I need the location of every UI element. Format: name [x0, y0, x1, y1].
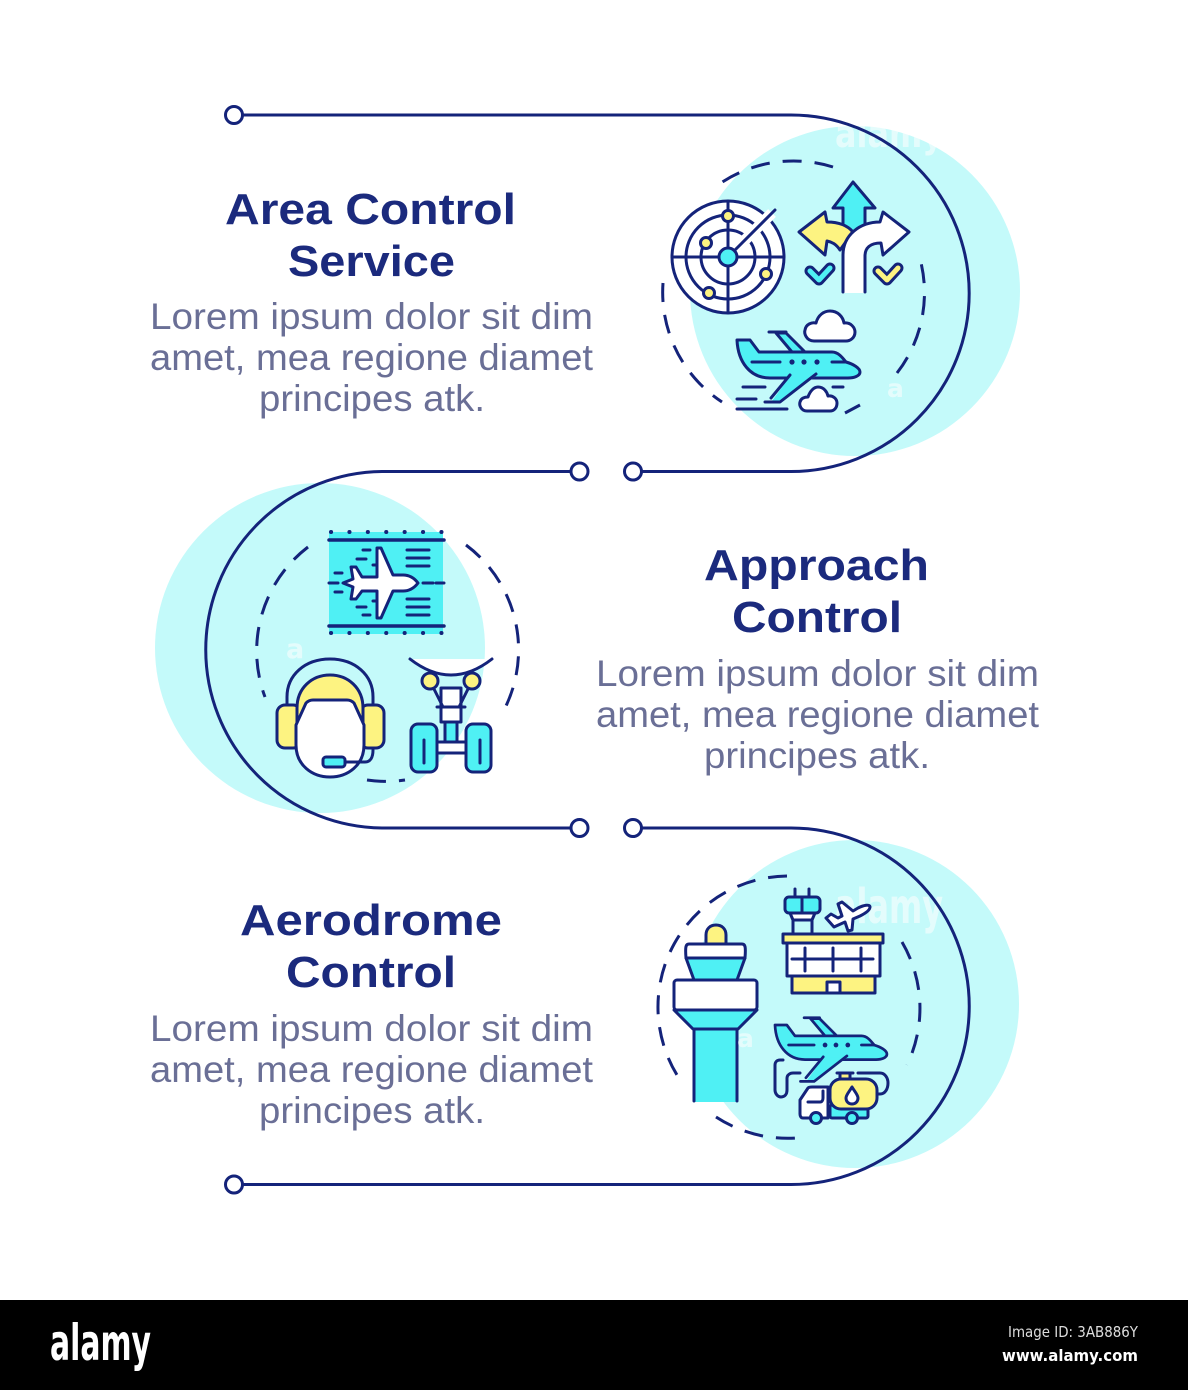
- panel: area control service background circle: [690, 126, 1020, 456]
- connector line: top section: [226, 106, 969, 480]
- footer url: www.alamy.com: [1002, 1346, 1138, 1365]
- text block: approach control: principes atk.: [704, 735, 930, 776]
- heading: area control service: [225, 185, 516, 286]
- connector line: bottom section: [226, 820, 969, 1193]
- icon: landing gear: [410, 659, 492, 772]
- icon: plane and fuel truck: [775, 1018, 888, 1124]
- heading: aerodrome control: Aerodrome: [240, 896, 502, 945]
- heading: aerodrome control: [240, 896, 502, 997]
- panel: approach control background circle: [155, 483, 485, 813]
- watermark: letter near plane: a: [887, 374, 904, 403]
- text block: approach control: Lorem ipsum dolor sit dim: [596, 653, 1039, 694]
- heading: approach control: Approach: [704, 541, 929, 590]
- watermark: letter in middle circle: a: [286, 634, 304, 665]
- footer image id: Image ID: 3AB886Y: [1008, 1323, 1139, 1341]
- text block: aerodrome control: amet, mea regione diamet: [150, 1049, 594, 1090]
- watermark: top circle: alamy: [835, 112, 943, 156]
- heading: area control service: Area Control: [225, 185, 516, 234]
- footer logo: alamy: [50, 1314, 151, 1372]
- watermark: letter near tower: a: [737, 1024, 754, 1053]
- text block: aerodrome control: Lorem ipsum dolor sit dim: [150, 1008, 593, 1049]
- text block: approach control: [596, 653, 1040, 776]
- dashed ring: area control: [663, 161, 924, 413]
- icon: plane in clouds: [737, 311, 860, 411]
- dashed ring: approach control: [257, 545, 519, 781]
- text block: area control service: principes atk.: [259, 378, 485, 419]
- text block: aerodrome control: principes atk.: [259, 1090, 485, 1131]
- icon: control tower: [674, 925, 757, 1102]
- text block: approach control: amet, mea regione diamet: [596, 694, 1040, 735]
- heading: approach control: Control: [732, 593, 902, 642]
- text block: area control service: Lorem ipsum dolor sit dim: [150, 296, 593, 337]
- text block: area control service: amet, mea regione diamet: [150, 337, 594, 378]
- text block: area control service: [150, 296, 594, 419]
- icon: pilot with headset: [277, 659, 384, 777]
- footer bar: [0, 1300, 1188, 1390]
- text block: aerodrome control: [150, 1008, 594, 1131]
- icon: runway with plane: [329, 532, 444, 634]
- icon: direction arrows: [799, 182, 909, 293]
- connector line: middle section: [206, 463, 588, 836]
- heading: approach control: [704, 541, 929, 642]
- icon: airport terminal: [783, 889, 883, 993]
- heading: area control service: Service: [288, 237, 455, 286]
- panel: aerodrome control background circle: [691, 840, 1019, 1168]
- dashed ring: aerodrome control: [658, 876, 920, 1138]
- icon: radar: [672, 201, 784, 313]
- watermark: bottom circle: alamy: [835, 879, 943, 935]
- heading: aerodrome control: Control: [286, 948, 456, 997]
